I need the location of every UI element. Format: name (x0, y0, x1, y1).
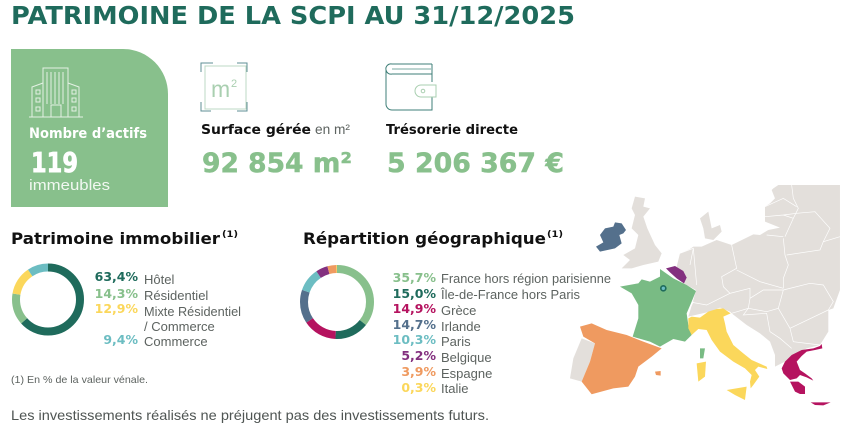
legend: patrimoine (95, 269, 241, 349)
heading: patrimoine immobilier: (1) (222, 230, 238, 240)
legend: répartition: 10,3% (393, 332, 436, 347)
legend: patrimoine: 63,4% (95, 269, 138, 284)
France (620, 269, 696, 347)
Paris marker (661, 286, 666, 291)
icon: m2 square: 2 (231, 78, 237, 90)
panel: nombre d'actifs (11, 49, 168, 207)
legend: répartition: Espagne (441, 366, 492, 381)
legend: répartition: 35,7% (393, 270, 436, 285)
legend: patrimoine: 12,9% (95, 301, 138, 316)
legend: répartition (393, 270, 611, 396)
countries: central and eastern europe (677, 185, 840, 367)
icon: wallet (386, 64, 436, 110)
legend: répartition: Grèce (441, 303, 476, 318)
icon: m2 square: m (211, 76, 230, 102)
disclaimer: Les investissements réalisés ne préjugent pas des investissements futurs. (11, 407, 489, 423)
legend: patrimoine: Hôtel (144, 272, 174, 287)
United Kingdom (622, 197, 662, 268)
value: surface: 92 854 m² (202, 148, 352, 179)
label: nombre d'actifs: Nombre d’actifs (29, 126, 147, 142)
legend: répartition: Belgique (441, 350, 492, 365)
Greece (782, 344, 831, 405)
legend: répartition: 3,9% (401, 364, 436, 379)
label: surface gérée: Surface gérée (201, 122, 311, 138)
legend: répartition: 0,3% (401, 380, 436, 395)
donut chart: patrimoine (16, 268, 80, 332)
legend: patrimoine: Commerce (144, 334, 208, 349)
Portugal (570, 338, 595, 382)
number: 119: 119 (31, 146, 78, 179)
value: trésorerie: 5 206 367 € (387, 148, 564, 179)
unit: en m2: en m² (315, 121, 350, 137)
legend: répartition: 15,0% (393, 286, 436, 301)
Spain (580, 323, 662, 394)
Italy (688, 308, 767, 400)
label: immeubles: immeubles (29, 177, 110, 194)
legend: patrimoine: Mixte Résidentiel (144, 304, 241, 319)
heading: patrimoine immobilier: Patrimoine immobilier (11, 229, 220, 248)
map: europe (570, 185, 840, 405)
heading: répartition géographique: Répartition géographique (303, 229, 546, 248)
icon: building (29, 68, 83, 117)
panel: surface gérée (201, 63, 352, 179)
legend: répartition: Île-de-France hors Paris (440, 287, 580, 302)
label: trésorerie directe: Trésorerie directe (386, 122, 518, 138)
legend: patrimoine: Résidentiel (144, 288, 208, 303)
Belgium (666, 266, 687, 283)
heading: répartition géographique: (1) (547, 230, 563, 240)
legend: patrimoine: 14,3% (95, 286, 138, 301)
donut chart: répartition (304, 269, 370, 335)
title: PATRIMOINE DE LA SCPI AU 31/12/2025 (11, 1, 575, 30)
footnote: (1) En % de la valeur vénale. (11, 374, 148, 386)
legend: répartition: Irlande (441, 319, 481, 334)
legend: répartition: 14,9% (393, 301, 436, 316)
Ireland (596, 222, 626, 252)
countries: western europe (570, 197, 767, 400)
icon: m2 square (201, 63, 247, 111)
panel: trésorerie directe (386, 64, 564, 179)
legend: patrimoine: / Commerce (144, 319, 215, 334)
legend: répartition: 5,2% (401, 348, 436, 363)
legend: répartition: 14,7% (393, 317, 436, 332)
legend: répartition: Italie (441, 381, 468, 396)
legend: répartition: Paris (441, 334, 471, 349)
legend: répartition: France hors région parisienne (441, 271, 611, 286)
legend: patrimoine: 9,4% (103, 332, 138, 347)
